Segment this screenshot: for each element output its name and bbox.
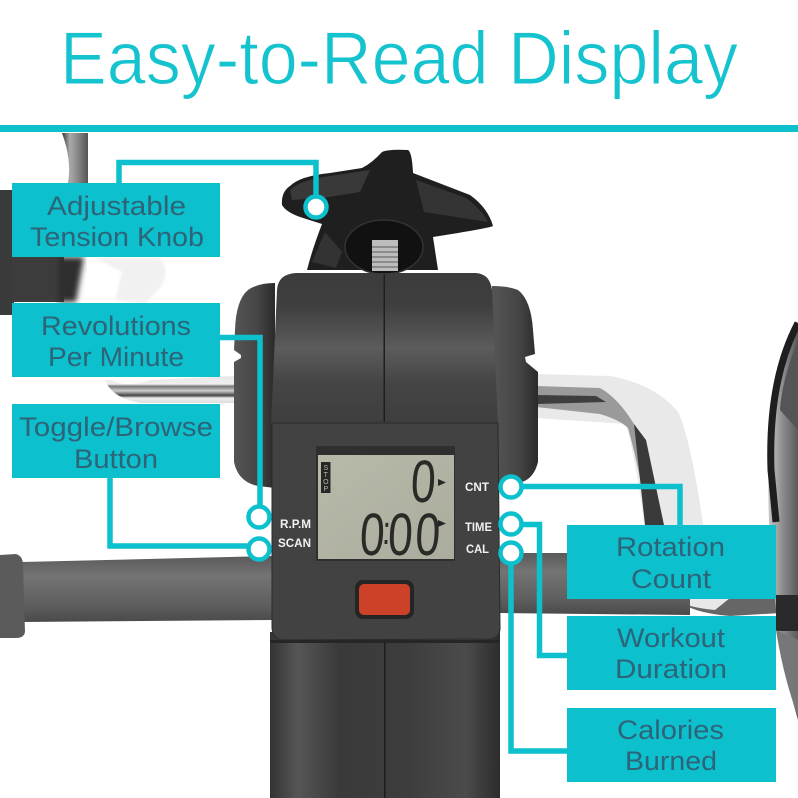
CNT label: CNT [465, 480, 490, 494]
right side lug [492, 286, 538, 488]
lower body column [270, 632, 500, 798]
STOP indicator [321, 462, 330, 493]
callout: adjustable tension knob: Adjustable [47, 191, 186, 221]
callout: calories burned: Burned [625, 746, 717, 776]
R.P.M label: R.P.M [280, 517, 311, 531]
callout: workout duration [567, 616, 776, 690]
callout: adjustable tension knob [12, 183, 220, 257]
LCD bezel [316, 446, 455, 561]
callout: adjustable tension knob: Tension Knob [30, 222, 204, 252]
left pedal handle and crank (background) [0, 133, 234, 403]
upper body housing [271, 273, 498, 424]
callout: rotation count: Rotation [616, 532, 725, 562]
callout: workout duration: Duration [615, 654, 727, 684]
connector: calories burned [500, 542, 568, 751]
connector: revolutions per minute [220, 338, 270, 528]
display panel [272, 423, 500, 640]
connector: toggle button [110, 478, 270, 560]
STOP indicator: S [323, 465, 328, 472]
count arrow [438, 479, 446, 486]
callout: revolutions per minute [12, 303, 220, 377]
LCD screen [318, 455, 454, 559]
SCAN label: SCAN [278, 536, 311, 550]
callout: revolutions per minute: Per Minute [48, 342, 184, 372]
tension knob [282, 150, 493, 274]
time reading: 0 [414, 502, 442, 569]
callout: toggle/browse button [12, 404, 220, 478]
time reading: 0 [358, 502, 386, 569]
STOP indicator: P [323, 486, 328, 493]
callout: calories burned: Calories [617, 715, 724, 745]
connector: tension knob [119, 162, 326, 218]
callout: toggle/browse button: Toggle/Browse [19, 412, 213, 442]
foam handle bar [0, 553, 690, 638]
right wheel [768, 323, 798, 720]
title rule [0, 125, 798, 132]
callout: rotation count [567, 525, 776, 599]
right pedal crank [536, 374, 798, 616]
callout: calories burned [567, 708, 776, 782]
connector: workout duration [500, 514, 568, 656]
STOP indicator: T [324, 472, 329, 479]
time reading: : [381, 509, 392, 553]
callout: toggle/browse button: Button [74, 444, 158, 474]
TIME label: TIME [465, 520, 492, 534]
CAL label: CAL [466, 542, 489, 556]
STOP indicator: O [323, 479, 329, 486]
left side lug [234, 283, 275, 488]
callout: rotation count: Count [631, 564, 712, 594]
connector: rotation count [500, 476, 680, 526]
callout: workout duration: Workout [617, 623, 726, 653]
time reading: 0 [386, 502, 415, 569]
rotation count reading: 0 [409, 449, 437, 516]
red button [355, 580, 414, 619]
time arrow [438, 520, 446, 527]
callout: revolutions per minute: Revolutions [41, 311, 191, 341]
title: Easy-to-Read Display [60, 16, 738, 100]
